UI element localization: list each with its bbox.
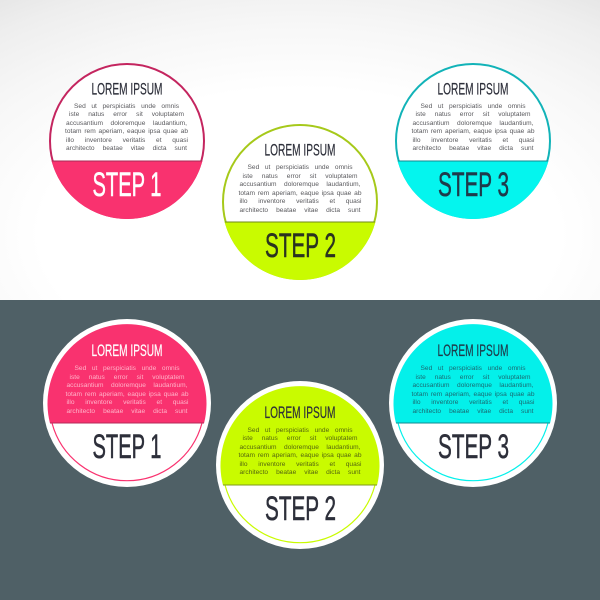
panel: step 3 light: accusantium doloremque laudantium, <box>412 120 534 126</box>
panel: step 3 light: Sed ut perspiciatis unde omnis <box>420 102 526 110</box>
panel: step 3 light: totam rem aperiam, eaque ipsa quae ab <box>412 128 534 135</box>
panel: step 2 dark: architecto beatae vitae dicta sunt <box>240 469 360 476</box>
panel: step 2 light: totam rem aperiam, eaque ipsa quae ab <box>238 190 362 196</box>
panel: step 2 dark: accusantium doloremque laudantium, <box>240 444 360 450</box>
panel: step 2 light: architecto beatae vitae dicta sunt <box>240 206 360 214</box>
panel: step 2 dark: iste natus error sit voluptatem <box>242 435 358 442</box>
top section background <box>0 0 600 300</box>
panel: step 1 light <box>49 63 205 219</box>
panel: step 1 light: accusantium doloremque laudantium, <box>66 120 187 126</box>
panel: step 3 dark: STEP 3 <box>438 428 509 466</box>
panel: step 1 dark: illo inventore veritatis et quasi <box>66 399 188 406</box>
panel: step 3 dark: architecto beatae vitae dicta sunt <box>412 408 534 414</box>
panel: step 3 dark: illo inventore veritatis et quasi <box>412 399 534 406</box>
bottom section background <box>0 300 600 600</box>
panel: step 1 dark: LOREM IPSUM <box>92 342 162 360</box>
panel: step 1 dark: Sed ut perspiciatis unde omnis <box>74 365 180 372</box>
panel: step 2 dark: LOREM IPSUM <box>264 404 336 422</box>
panel: step 1 light: iste natus error sit voluptatem <box>69 111 184 118</box>
panel: step 2 dark: totam rem aperiam, eaque ipsa quae ab <box>238 452 362 459</box>
panel: step 2 light: iste natus error sit voluptatem <box>242 172 358 180</box>
panel: step 3 dark: accusantium doloremque laudantium, <box>412 382 534 389</box>
panel: step 1 light: LOREM IPSUM <box>91 80 162 98</box>
panel: step 3 dark <box>389 319 557 487</box>
panel: step 3 dark: totam rem aperiam, eaque ipsa quae ab <box>412 390 534 398</box>
panel: step 1 light: architecto beatae vitae dicta sunt <box>66 145 187 152</box>
panel: step 2 dark: Sed ut perspiciatis unde omnis <box>248 426 352 434</box>
panel: step 3 light: STEP 3 <box>438 166 509 204</box>
panel: step 2 light: illo inventore veritatis et quasi <box>240 198 362 205</box>
panel: step 3 light <box>395 63 551 219</box>
panel: step 3 dark: iste natus error sit voluptatem <box>416 374 530 380</box>
panel: step 2 dark <box>216 381 384 549</box>
panel: step 2 light: LOREM IPSUM <box>264 142 336 160</box>
panel: step 1 light: totam rem aperiam, eaque ipsa quae ab <box>65 128 188 135</box>
panel: step 1 dark: iste natus error sit voluptatem <box>70 374 184 380</box>
panel: step 3 dark: LOREM IPSUM <box>438 342 508 360</box>
panel: step 2 light: accusantium doloremque laudantium, <box>240 181 360 188</box>
panel: step 2 dark: illo inventore veritatis et quasi <box>240 460 362 468</box>
panel: step 1 dark: accusantium doloremque laudantium, <box>66 382 188 389</box>
panel: step 3 dark: Sed ut perspiciatis unde omnis <box>420 365 526 372</box>
panel: step 2 dark: STEP 2 <box>265 490 336 528</box>
panel: step 1 dark <box>43 319 211 487</box>
panel: step 1 light: illo inventore veritatis et quasi <box>66 136 188 144</box>
panel: step 1 dark: STEP 1 <box>92 428 162 466</box>
panel: step 3 light: iste natus error sit voluptatem <box>416 111 530 118</box>
panel: step 1 dark: totam rem aperiam, eaque ipsa quae ab <box>66 390 188 398</box>
panel: step 3 light: illo inventore veritatis et quasi <box>412 136 534 144</box>
panel: step 2 light: Sed ut perspiciatis unde omnis <box>248 164 352 171</box>
panel: step 2 light: STEP 2 <box>265 227 336 265</box>
panel: step 1 light: Sed ut perspiciatis unde omnis <box>74 102 179 110</box>
panel: step 3 light: architecto beatae vitae dicta sunt <box>412 145 534 152</box>
panel: step 3 light: LOREM IPSUM <box>438 80 508 98</box>
panel: step 1 dark: architecto beatae vitae dicta sunt <box>66 408 188 414</box>
panel: step 1 light: STEP 1 <box>92 166 161 204</box>
panel: step 2 light <box>222 124 378 280</box>
